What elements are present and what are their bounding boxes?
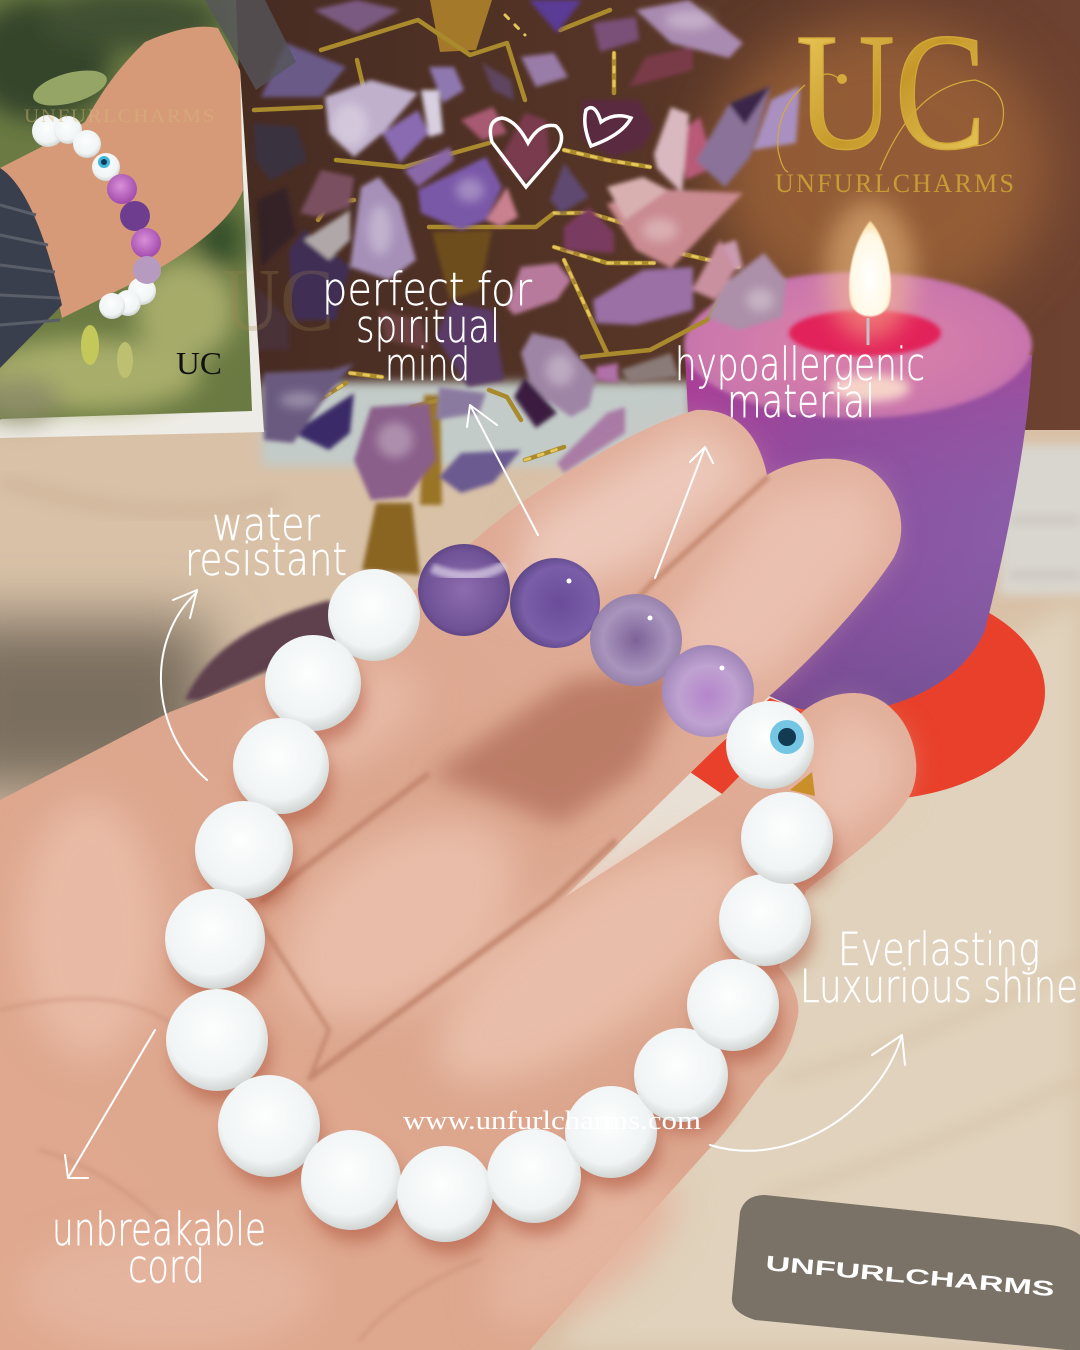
arrow: to hypoallergenic [655, 447, 713, 578]
inset bracelet [32, 115, 161, 319]
caption: water resistant: resistant [185, 533, 347, 586]
sleeve [0, 168, 62, 368]
caption: unbreakable cord: cord [128, 1240, 205, 1293]
caption: unbreakable cord: unbreakable [52, 1203, 266, 1256]
candle with red plate [684, 200, 1045, 800]
arrow: to spiritual [467, 405, 538, 535]
white beads [165, 569, 833, 1242]
caption: water resistant [185, 498, 347, 586]
evil eye bead [726, 701, 815, 796]
hand holding bracelet [0, 410, 916, 1350]
faint watermark: UC on tree: UC [222, 251, 334, 350]
arm [0, 27, 243, 318]
finger shadows [430, 665, 690, 825]
inset photo card [0, 0, 296, 438]
arrow: to water resistant [161, 590, 207, 780]
caption: hypoallergenic material: hypoallergenic [675, 338, 925, 391]
small black logo: UC [176, 345, 222, 381]
icon: flame [849, 221, 891, 316]
amethyst gem tree [185, 0, 800, 700]
faint watermark text: UNFURLCHARMS [24, 106, 216, 127]
caption: perfect for spiritual mind: perfect for [322, 263, 532, 316]
arrow: to everlasting shine [710, 1035, 905, 1151]
bead shadows on skin [172, 651, 836, 1254]
website url: www.unfurlcharms.com [403, 1106, 701, 1135]
amethyst chips [254, 0, 800, 500]
card paper [0, 70, 264, 438]
tape [205, 0, 296, 90]
bracelet [165, 544, 833, 1242]
icon: hearts [490, 108, 631, 187]
logo: UC Unfurlcharms: UC [796, 0, 986, 185]
arrow: to unbreakable cord [65, 1030, 155, 1178]
light finger pads [20, 425, 900, 1350]
caption: hypoallergenic material [675, 338, 925, 428]
caption: perfect for spiritual mind [322, 263, 532, 391]
photo background foliage [0, 0, 252, 422]
brand badge [732, 1195, 1080, 1350]
caption: everlasting luxurious shine [800, 923, 1078, 1013]
amethyst beads [418, 544, 754, 737]
caption: perfect for spiritual mind: spiritual [356, 300, 500, 353]
caption: hypoallergenic material: material [727, 375, 875, 428]
gap between fingers [565, 695, 805, 897]
brand badge: UNFURLCHARMS [765, 1252, 1055, 1301]
logo: UC Unfurlcharms: UNFURLCHARMS [775, 169, 1014, 198]
caption: unbreakable cord [52, 1203, 266, 1293]
stone highlights [280, 10, 774, 458]
gold wires [254, 10, 739, 460]
tree trunk [185, 0, 492, 700]
caption: perfect for spiritual mind: mind [385, 338, 470, 391]
caption: water resistant: water [212, 498, 320, 551]
